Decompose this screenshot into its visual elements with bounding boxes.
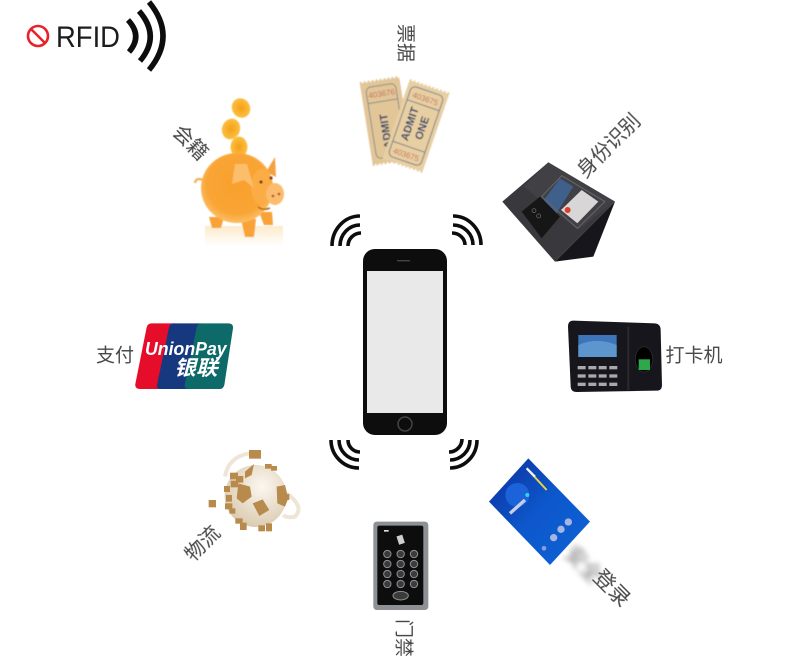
icon: tickets: ONE xyxy=(413,115,432,142)
icon: UnionPay card: 银联 xyxy=(174,357,220,380)
phone home button xyxy=(398,417,412,431)
label: 票据: 票据 xyxy=(394,24,416,62)
icon: face recognition terminal xyxy=(502,162,615,262)
icon: UnionPay card xyxy=(135,323,233,389)
label: 门禁: 门禁 xyxy=(392,619,414,657)
label: 身份识别: 身份识别 xyxy=(572,109,645,182)
icon: logistics globe xyxy=(209,450,299,531)
icon: blue login card xyxy=(489,458,590,565)
label: 安全登录 (partly blurred): 安全 xyxy=(560,542,606,588)
icon: tickets: 403675 xyxy=(392,146,421,164)
icon: piggy bank with coins xyxy=(195,95,284,246)
label: 支付: 支付 xyxy=(96,344,134,366)
logo: RFID with signal waves: RFID xyxy=(56,21,120,54)
icon: tickets: ADMIT xyxy=(399,105,422,142)
label: 安全登录 (partly blurred): 登录 xyxy=(589,566,634,611)
label: 会籍: 会籍 xyxy=(168,120,213,165)
icon: smartphone xyxy=(363,249,447,435)
label: 打卡机: 打卡机 xyxy=(665,344,723,366)
signal waves around phone xyxy=(331,216,481,468)
logo: RFID with signal waves xyxy=(28,2,163,70)
phone screen xyxy=(367,271,443,413)
icon: UnionPay card: UnionPay xyxy=(145,338,228,359)
icon: tickets xyxy=(360,77,449,172)
icon: time clock xyxy=(568,321,662,392)
label: 物流: 物流 xyxy=(180,521,225,566)
icon: tickets: 403676 xyxy=(368,87,396,100)
icon: tickets: ADMIT xyxy=(378,113,395,149)
icon: access keypad xyxy=(373,522,428,610)
icon: tickets: 403675 xyxy=(411,90,440,108)
label: 安全登录 (partly blurred) xyxy=(560,542,634,611)
